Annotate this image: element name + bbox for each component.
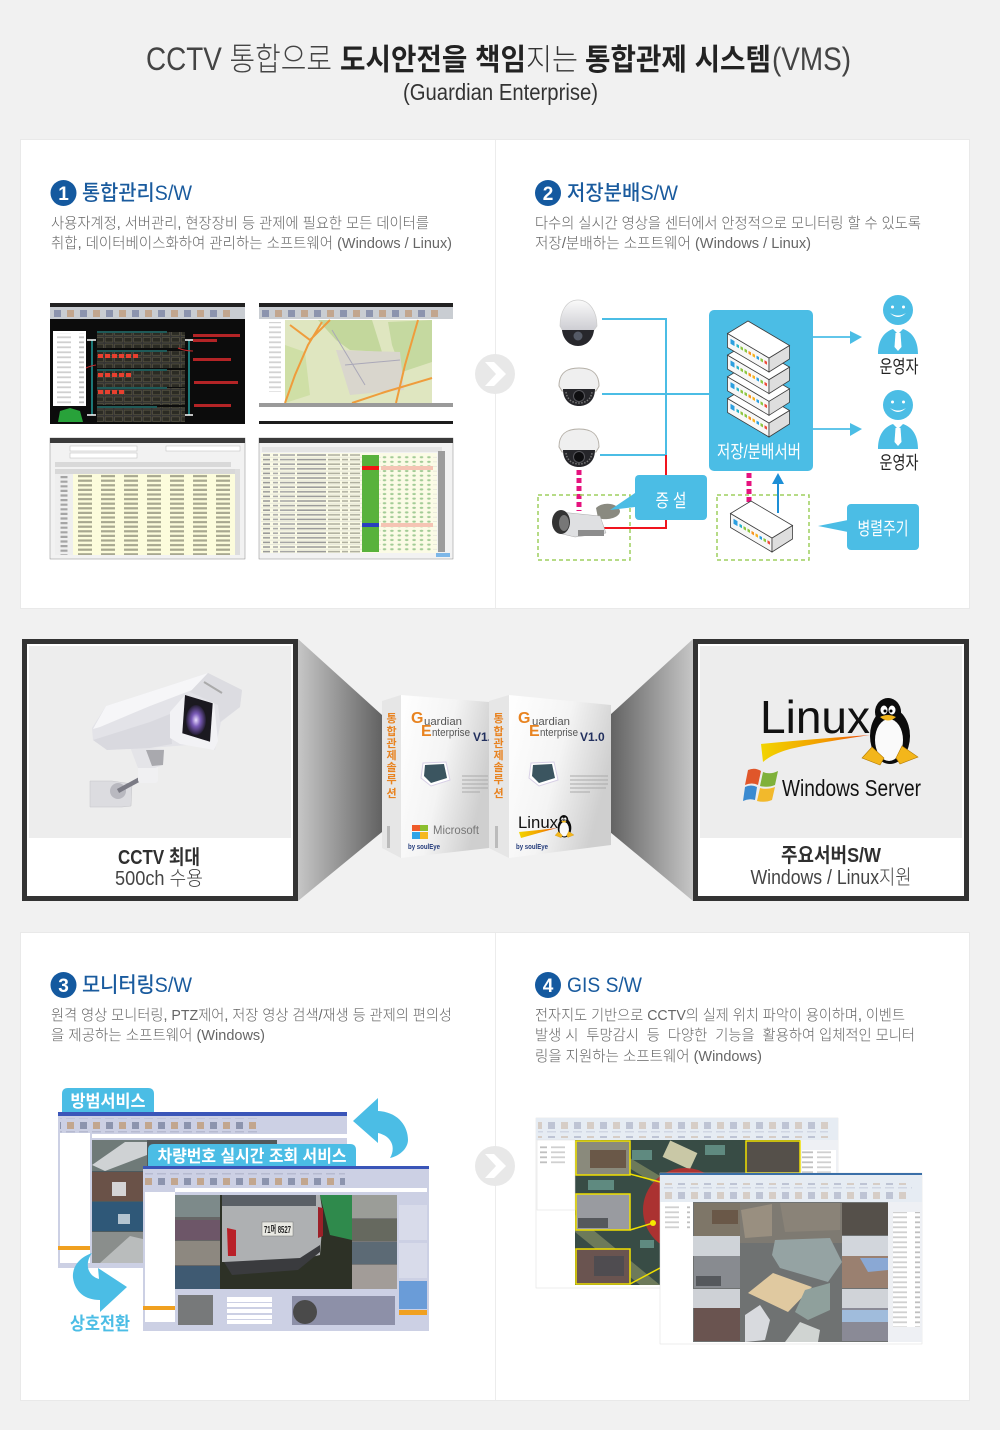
product box: Linux: uardian (532, 716, 570, 728)
product box: Microsoft: E (421, 723, 432, 740)
operator 1: 운영자 (880, 357, 919, 377)
window: crime prevention (58, 1112, 347, 1268)
subtitle: (Guardian Enterprise) (403, 79, 598, 105)
section 1 heading: 1 (58, 184, 69, 205)
server caption (750, 844, 912, 889)
product box: Linux: nterprise (540, 727, 578, 739)
logo: Windows Server (743, 769, 921, 802)
pink dashed links (579, 470, 749, 511)
증설 callout (610, 475, 707, 520)
section 4 heading (535, 972, 642, 998)
tab: 차량번호 실시간 조회 서비스: 차량번호 실시간 조회 서비스 (158, 1147, 346, 1166)
section 1 description: 취합, 데이터베이스화하여 관리하는 소프트웨어 (Windows / Linux) (51, 235, 452, 252)
logo: Linux: Linux (760, 691, 870, 743)
product box: Microsoft: G (411, 710, 423, 727)
section 4 description (535, 1007, 915, 1065)
product box: Microsoft (382, 695, 498, 858)
arrowheads to operators (850, 331, 862, 436)
product box: Microsoft: Microsoft (433, 823, 480, 837)
window: licence plate lookup (143, 1166, 429, 1331)
title: 통합관제 시스템 (585, 44, 771, 77)
server caption: 주요서버S/W (781, 844, 881, 867)
arrow: lower switch (73, 1253, 127, 1312)
panel: server software (696, 642, 966, 898)
CCTV caption: CCTV 최대 (118, 846, 200, 869)
icon: speed dome camera (560, 300, 597, 346)
병렬주기 callout: 병렬주기 (858, 519, 908, 539)
icon: housing camera (90, 673, 242, 807)
product box: Linux: E (529, 723, 540, 740)
window: 2D map (536, 1118, 838, 1288)
icon: switch (730, 501, 792, 552)
section 4 heading: 4 (543, 976, 554, 997)
product box: Linux (489, 695, 611, 858)
icon: bullet camera (552, 504, 620, 537)
section 3 description: 을 제공하는 소프트웨어 (Windows) (51, 1027, 265, 1044)
section 4 description: 링을 지원하는 소프트웨어 (Windows) (535, 1048, 762, 1065)
server caption: Windows / Linux지원 (750, 866, 912, 889)
diagram: storage distribution (538, 295, 919, 560)
logo: Windows Server: Windows Server (782, 775, 921, 801)
section 2 heading (535, 180, 678, 206)
icon: dome camera (559, 429, 599, 467)
section 3 heading: 3 (58, 976, 69, 997)
screenshot: monitoring windows (58, 1088, 429, 1334)
operator 2: 운영자 (880, 453, 919, 473)
screenshot: control room grid (50, 303, 245, 424)
panel: CCTV capacity (24, 642, 296, 898)
product box: Microsoft: by soulEye (408, 844, 440, 851)
window: 3D map (660, 1173, 922, 1344)
screenshot: table (50, 438, 245, 559)
section 2 description: 저장/분배하는 소프트웨어 (Windows / Linux) (535, 235, 811, 252)
product box: Linux: V1.0 (580, 730, 605, 744)
logo: Linux (760, 691, 918, 765)
funnel: left wedge (298, 639, 382, 901)
section 3 description (51, 1007, 452, 1044)
product box: Linux: by soulEye (516, 844, 548, 851)
section 4 heading: GIS S/W (567, 974, 642, 997)
section 2 description (535, 215, 921, 252)
section 1 description: 사용자계정, 서버관리, 현장장비 등 관제에 필요한 모든 데이터를 (51, 215, 429, 232)
section 2 description: 다수의 실시간 영상을 센터에서 안정적으로 모니터링 할 수 있도록 (535, 215, 921, 232)
product box: Microsoft: nterprise (432, 727, 470, 739)
section 3 heading: 모니터링S/W (82, 974, 192, 997)
blue upward arrow (772, 473, 784, 513)
section 4 description: 전자지도 기반으로 CCTV의 실제 위치 파악이 용이하며, 이벤트 (535, 1007, 905, 1024)
screenshot: status list (259, 438, 453, 559)
tab: 방범서비스 (62, 1088, 154, 1112)
storage server box (709, 310, 813, 471)
product box: Linux: 통합관제솔루션 (493, 712, 504, 800)
section 3 description: 원격 영상 모니터링, PTZ제어, 저장 영상 검색/재생 등 관제의 편의성 (51, 1007, 452, 1024)
product box: Linux: Linux (518, 813, 558, 832)
storage server box: 저장/분배서버 (717, 442, 801, 462)
증설 callout: 증 설 (656, 491, 686, 511)
title (146, 41, 851, 77)
green dashed frames (538, 495, 809, 560)
title: (VMS) (772, 41, 851, 77)
arrow: section 1 to 2 (475, 354, 515, 394)
arrow: upper switch (353, 1098, 408, 1158)
상호전환 label: 상호전환 (70, 1314, 130, 1334)
section 2 heading: 저장분배S/W (567, 182, 678, 205)
operator 2 (878, 390, 919, 473)
screenshot: map (259, 303, 453, 424)
product box: Microsoft: uardian (424, 716, 462, 728)
icon: dome camera (559, 368, 599, 406)
section 2 heading: 2 (543, 184, 553, 205)
product box: Microsoft: 통합관제솔루션 (386, 712, 397, 800)
section 4 description: 발생 시 투망감시 등 다양한 기능을 활용하여 입체적인 모니터 (535, 1027, 915, 1044)
tab: 방범서비스: 방범서비스 (70, 1092, 146, 1111)
title: 도시안전을 책임 (340, 44, 526, 77)
section 1 heading: 통합관리S/W (82, 182, 192, 205)
section 1 description (51, 215, 452, 252)
product box: Linux: G (518, 710, 530, 727)
funnel: right wedge (610, 639, 693, 901)
screenshot: GIS windows (536, 1118, 922, 1344)
title: 지는 (526, 44, 578, 77)
section 1 heading (50, 180, 192, 206)
title: CCTV 통합으로 (146, 41, 332, 77)
connection lines (600, 319, 851, 528)
panel: bottom row (20, 932, 970, 1400)
window: licence plate lookup: 71머 8527 (264, 1223, 291, 1236)
panel: top row (20, 140, 970, 608)
CCTV caption (115, 846, 203, 890)
CCTV caption: 500ch 수용 (115, 868, 203, 890)
section 3 heading (50, 972, 192, 998)
arrow: section 3 to 4 (475, 1146, 515, 1186)
operator 1 (878, 295, 919, 377)
병렬주기 callout (818, 504, 919, 550)
product box: Microsoft: V1.0 (473, 730, 498, 744)
